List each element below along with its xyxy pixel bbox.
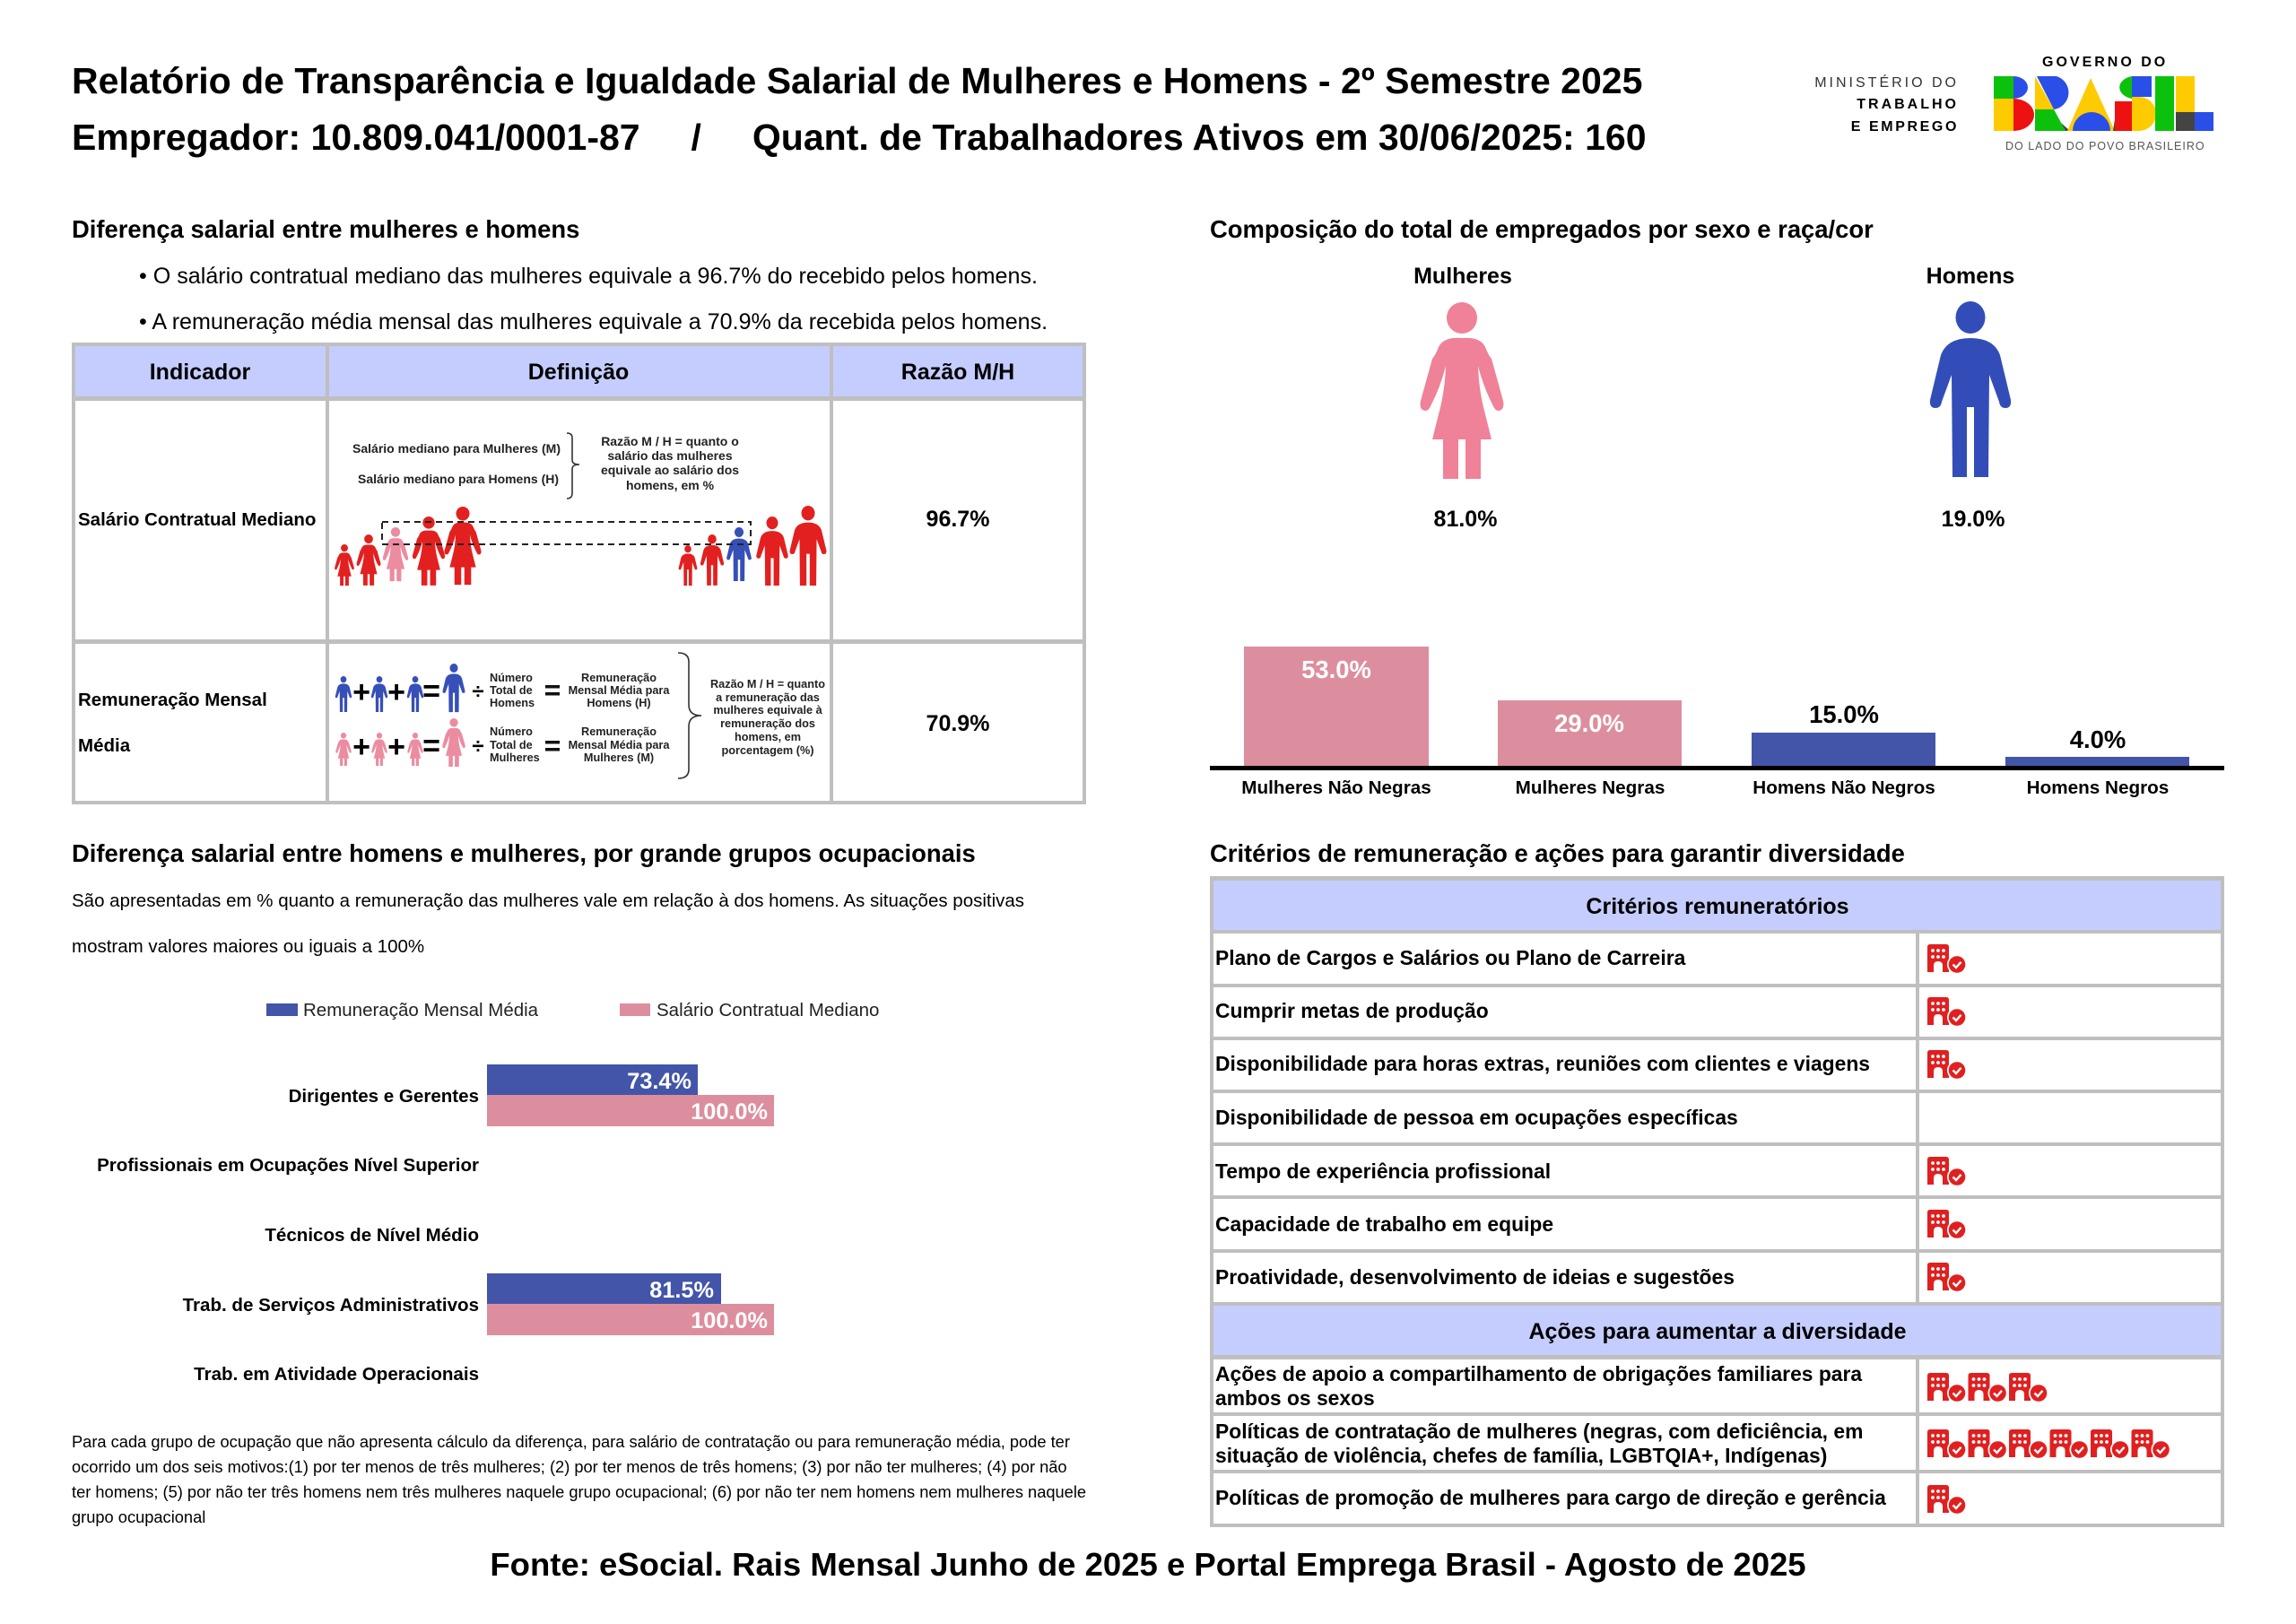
horizontal bar chart: Dirigentes e Gerentes [289, 1086, 479, 1107]
diagram: average pay definition: + [387, 675, 405, 709]
pictogram: men 19% [1926, 264, 2014, 532]
panel: pay gap by occupational group [72, 839, 1086, 1526]
text: explanation: mostram valores maiores ou iguais a 100% [72, 936, 424, 957]
table header: Indicador [150, 360, 251, 385]
row: average monthly pay label: Remuneração Mensal [78, 690, 267, 710]
diagram: average pay definition: Mensal Média para [569, 684, 670, 697]
horizontal bar chart: 100.0% [691, 1099, 768, 1125]
diagram: median salary definition: salário das mulheres [607, 448, 733, 463]
diagram: average pay definition: ÷ [472, 734, 484, 759]
pictogram: women 81%: 81.0% [1434, 507, 1497, 532]
diagram: average pay definition: remuneração dos [720, 717, 815, 730]
text: footnote: ter homens; (5) por não ter três homens nem três mulheres naquele grupo ocupacional; (6) por não ter nem homens nem mulheres naquele [72, 1482, 1086, 1501]
diagram: average pay definition: Mensal Média para [569, 739, 670, 751]
diagram: average pay definition: + [352, 675, 370, 709]
table header [150, 360, 1014, 385]
row labels: criteria: Cumprir metas de produção [1215, 999, 1489, 1022]
row labels: actions: Políticas de promoção de mulheres para cargo de direção e gerência [1215, 1486, 1886, 1509]
text: footnote: ocorrido um dos seis motivos:(1) por ter menos de três mulheres; (2) por ter menos de três homens; (3) por não ter mulheres; (4) por não [72, 1457, 1067, 1476]
bar chart: sex and race [1210, 647, 2224, 798]
logo: ministry and government: DO LADO DO POVO BRASILEIRO [2005, 140, 2205, 152]
text: explanation: São apresentadas em % quanto a remuneração das mulheres vale em relação à dos homens. As situações positivas [72, 890, 1024, 911]
diagram: average pay definition: Homens (H) [587, 697, 651, 709]
horizontal bar chart: Profissionais em Ocupações Nível Superior [97, 1155, 479, 1176]
logo: ministry and government: MINISTÉRIO DO [1814, 74, 1959, 91]
pictogram: women 81% [1413, 264, 1512, 532]
legend: Salário Contratual Mediano [657, 1000, 879, 1020]
diagram: average pay definition: Homens [490, 697, 535, 709]
bar chart: sex and race: Homens Não Negros [1752, 777, 1935, 798]
value: 96.7%: 96.7% [926, 507, 989, 532]
panel: criteria and actions [1210, 839, 2224, 1527]
diagram: average pay definition: Número [490, 672, 533, 684]
heading: criteria: Critérios de remuneração e ações para garantir diversidade [1210, 839, 1905, 867]
legend: Remuneração Mensal Média [303, 1000, 539, 1020]
diagram: average pay definition: Remuneração [581, 672, 657, 684]
bar chart: sex and race: 15.0% [1809, 700, 1879, 728]
row labels: criteria: Disponibilidade para horas extras, reuniões com clientes e viagens [1215, 1052, 1870, 1075]
row: average monthly pay label [78, 690, 267, 756]
diagram: average pay definition: Razão M / H = quanto [710, 678, 825, 690]
text: footnote: grupo ocupacional [72, 1507, 205, 1526]
bar chart: sex and race: Mulheres Negras [1516, 777, 1665, 798]
bar chart: sex and race: Homens Negros [2027, 777, 2169, 798]
source footer: Fonte: eSocial. Rais Mensal Junho de 2025 e Portal Emprega Brasil - Agosto de 2025 [490, 1546, 1806, 1583]
diagram: average pay definition: mulheres equivale à [713, 704, 823, 716]
diagram: median salary definition [335, 433, 826, 586]
bar chart: sex and race: Mulheres Não Negras [1241, 777, 1431, 798]
heading: occupational groups: Diferença salarial entre homens e mulheres, por grande grupos ocupacionais [72, 839, 976, 867]
diagram: average pay definition: Total de [490, 684, 533, 697]
horizontal bar chart: 81.5% [649, 1278, 714, 1303]
text: footnote [72, 1432, 1086, 1526]
text: key findings [139, 264, 1048, 334]
diagram: average pay definition: Mulheres (M) [584, 751, 654, 764]
diagram: average pay definition: Remuneração [581, 725, 657, 738]
diagram: average pay definition: porcentagem (%) [722, 744, 813, 757]
title [72, 60, 1647, 158]
diagram: average pay definition: Total de [490, 739, 533, 751]
row labels: actions: ambos os sexos [1215, 1386, 1375, 1410]
heading: salary difference: Diferença salarial entre mulheres e homens [72, 215, 579, 243]
row labels: criteria [1215, 946, 1870, 1289]
icons: action checks [1927, 1373, 2170, 1515]
diagram: median salary definition: homens, em % [626, 478, 715, 492]
table: indicators [72, 343, 1086, 804]
header: remuneration criteria: Critérios remuneratórios [1586, 894, 1849, 919]
logo: ministry and government: GOVERNO DO [2042, 55, 2168, 70]
row labels: criteria: Plano de Cargos e Salários ou Plano de Carreira [1215, 946, 1686, 969]
text: key findings: • A remuneração média mensal das mulheres equivale a 70.9% da recebida pelos homens. [139, 309, 1048, 334]
value: 70.9%: 70.9% [926, 711, 989, 736]
logo: ministry and government: E EMPREGO [1851, 119, 1959, 135]
horizontal bar chart: 100.0% [691, 1308, 768, 1333]
row labels: actions: Ações de apoio a compartilhamento de obrigações familiares para [1215, 1362, 1862, 1385]
pictogram: men 19%: Homens [1926, 264, 2014, 289]
heading: composition: Composição do total de empregados por sexo e raça/cor [1210, 215, 1874, 243]
row labels: criteria: Capacidade de trabalho em equipe [1215, 1212, 1553, 1236]
text: explanation [72, 890, 1024, 957]
title: Relatório de Transparência e Igualdade Salarial de Mulheres e Homens - 2º Semestre 2025 [72, 60, 1642, 101]
diagram: average pay definition: a remuneração das [716, 691, 820, 704]
text: footnote: Para cada grupo de ocupação que não apresenta cálculo da diferença, para salário de contratação ou para remuneração média, pode ter [72, 1432, 1070, 1451]
bar chart: sex and race: 29.0% [1554, 709, 1624, 737]
table header: Definição [528, 360, 629, 385]
horizontal bar chart [97, 1064, 774, 1385]
diagram: average pay definition: ÷ [472, 680, 484, 704]
row labels: criteria: Proatividade, desenvolvimento de ideias e sugestões [1215, 1265, 1735, 1289]
legend [266, 1000, 879, 1020]
row labels: actions: situação de violência, chefes de família, LGBTQIA+, Indígenas) [1215, 1444, 1827, 1467]
panel: workforce composition [1210, 215, 2224, 798]
icons: criteria checks [1927, 944, 1967, 1293]
diagram: median salary definition: Salário mediano para Homens (H) [358, 472, 559, 486]
row labels: actions [1215, 1362, 1886, 1509]
header: diversity actions: Ações para aumentar a diversidade [1528, 1319, 1907, 1344]
table header: Razão M/H [901, 360, 1014, 385]
row: median contract salary label: Salário Contratual Mediano [78, 509, 316, 530]
bar chart: sex and race: 4.0% [2070, 725, 2126, 753]
pictogram: men 19%: 19.0% [1942, 507, 2005, 532]
horizontal bar chart: Trab. de Serviços Administrativos [183, 1295, 479, 1316]
logo: ministry and government: TRABALHO [1857, 97, 1959, 112]
row labels: actions: Políticas de contratação de mulheres (negras, com deficiência, em [1215, 1420, 1863, 1443]
horizontal bar chart: Trab. em Atividade Operacionais [194, 1364, 479, 1385]
diagram: average pay definition: = [422, 674, 440, 708]
diagram: average pay definition: + [387, 730, 405, 764]
text: key findings: • O salário contratual mediano das mulheres equivale a 96.7% do recebido pelos homens. [139, 264, 1038, 289]
diagram: average pay definition: homens, em [735, 731, 801, 743]
pictogram: women 81%: Mulheres [1413, 264, 1512, 289]
logo: ministry and government [1814, 55, 2213, 152]
row: average monthly pay label: Média [78, 735, 131, 756]
title: Empregador: 10.809.041/0001-87 / Quant. de Trabalhadores Ativos em 30/06/2025: 160 [72, 117, 1647, 158]
diagram: median salary definition: Salário mediano para Mulheres (M) [352, 441, 561, 456]
diagram: average pay definition: Número [490, 725, 533, 738]
diagram: average pay definition: = [422, 729, 440, 763]
bar chart: sex and race: 53.0% [1301, 656, 1371, 683]
row labels: criteria: Disponibilidade de pessoa em ocupações específicas [1215, 1106, 1738, 1129]
diagram: average pay definition: + [352, 730, 370, 764]
table: criteria and actions [1210, 876, 2224, 1527]
diagram: average pay definition [335, 653, 825, 778]
row labels: criteria: Tempo de experiência profissional [1215, 1159, 1551, 1183]
diagram: median salary definition: Razão M / H = quanto o [601, 434, 739, 448]
horizontal bar chart: Técnicos de Nível Médio [265, 1225, 479, 1246]
diagram: average pay definition: Mulheres [490, 751, 540, 764]
diagram: median salary definition: equivale ao salário dos [601, 463, 739, 477]
horizontal bar chart: 73.4% [627, 1069, 691, 1094]
panel: salary difference [72, 215, 1086, 804]
